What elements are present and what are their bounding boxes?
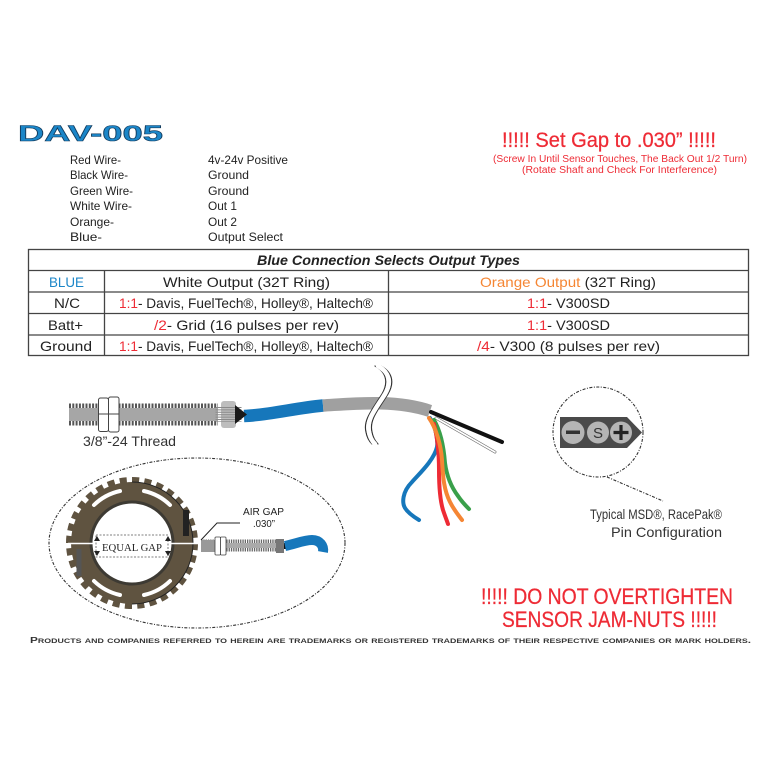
wire colour list: Green Wire- bbox=[70, 184, 133, 198]
white output column: White Output (32T Ring) bbox=[163, 274, 330, 290]
dashed magnifier circle bbox=[553, 387, 643, 477]
air gap detail inset bbox=[49, 458, 345, 628]
first column labels: N/C bbox=[54, 295, 80, 311]
dashed ellipse bbox=[49, 458, 345, 628]
wire colour list: Output Select bbox=[208, 230, 284, 244]
knurled collar bbox=[221, 401, 236, 428]
orange output column: 1:1- V300SD bbox=[527, 317, 610, 333]
grey cable bbox=[323, 403, 430, 411]
small blue cable bbox=[285, 540, 323, 552]
black strain relief tip bbox=[235, 405, 247, 424]
table heading: Blue Connection Selects Output Types bbox=[257, 252, 520, 268]
first column labels: Ground bbox=[40, 338, 92, 354]
wire colour list: Ground bbox=[208, 184, 249, 198]
white wire bbox=[436, 418, 495, 452]
wire colour list: White Wire- bbox=[70, 199, 132, 213]
gap warning callout: (Screw In Until Sensor Touches, The Back Out 1/2 Turn) bbox=[493, 153, 747, 165]
thread size label: 3/8”-24 Thread bbox=[83, 433, 176, 449]
cable break mark bbox=[365, 366, 392, 444]
pin plus bbox=[610, 422, 632, 444]
jam nuts bbox=[98, 397, 119, 432]
pin configuration caption: Pin Configuration bbox=[611, 524, 722, 540]
orange output column: 1:1- V300SD bbox=[527, 295, 610, 311]
pin configuration inset bbox=[553, 387, 663, 501]
pin minus bbox=[562, 421, 584, 444]
gap warning callout: (Rotate Shaft and Check For Interference) bbox=[522, 164, 717, 176]
white output column: /2- Grid (16 pulses per rev) bbox=[154, 317, 339, 333]
gap warning callout bbox=[493, 129, 747, 176]
threaded shaft bbox=[69, 408, 218, 421]
wire colour list: Out 2 bbox=[208, 215, 237, 229]
green wire bbox=[434, 420, 469, 509]
orange output column bbox=[477, 274, 660, 354]
white output column bbox=[119, 274, 374, 354]
wire colour list: Red Wire- bbox=[70, 153, 121, 167]
reluctor ring bbox=[68, 481, 198, 605]
orange output column: /4- V300 (8 pulses per rev) bbox=[477, 338, 660, 354]
air gap leader bbox=[201, 523, 240, 540]
air gap label bbox=[243, 507, 284, 530]
pin signal: S bbox=[593, 425, 603, 442]
first column labels: Batt+ bbox=[48, 317, 83, 333]
equal gap box: EQUAL GAP bbox=[102, 542, 162, 554]
pin configuration caption bbox=[590, 506, 723, 540]
wire colour list: Blue- bbox=[70, 230, 102, 244]
orange wire bbox=[429, 418, 462, 520]
trademark footer: Products and companies referred to herein are trademarks or registered trademarks of their respective companies or mark holders. bbox=[30, 636, 751, 645]
blue sleeve bbox=[244, 406, 323, 416]
wire colour list: Ground bbox=[208, 168, 249, 182]
wire colour list: Black Wire- bbox=[70, 168, 128, 182]
blue wire bbox=[403, 418, 437, 520]
sensor with cable and wires bbox=[69, 366, 502, 524]
red wire bbox=[434, 424, 448, 524]
wire colour list: Orange- bbox=[70, 215, 114, 229]
orange output column: Orange Output (32T Ring) bbox=[480, 274, 656, 290]
white output column: 1:1- Davis, FuelTech®, Holley®, Haltech® bbox=[119, 295, 374, 311]
overtighten warning: !!!!! DO NOT OVERTIGHTEN bbox=[481, 584, 733, 609]
wire colour list: Out 1 bbox=[208, 199, 237, 213]
overtighten warning bbox=[481, 584, 733, 632]
connector body bbox=[560, 417, 642, 448]
output types table bbox=[28, 250, 748, 356]
white output column: 1:1- Davis, FuelTech®, Holley®, Haltech® bbox=[119, 338, 374, 354]
title: DAV-005 bbox=[18, 121, 163, 146]
equal gap box bbox=[94, 535, 171, 557]
first column labels: BLUE bbox=[49, 274, 84, 290]
wire colour list: 4v-24v Positive bbox=[208, 153, 288, 167]
leader line bbox=[607, 477, 663, 501]
overtighten warning: SENSOR JAM-NUTS !!!!! bbox=[502, 607, 717, 632]
air gap label: AIR GAP bbox=[243, 507, 284, 518]
wire colour list bbox=[70, 153, 288, 244]
small sensor bbox=[201, 537, 286, 555]
pin configuration caption: Typical MSD®, RacePak® bbox=[590, 506, 723, 522]
gap warning callout: !!!!! Set Gap to .030” !!!!! bbox=[502, 129, 716, 152]
black wire bbox=[431, 412, 502, 442]
first column labels bbox=[40, 274, 92, 354]
air gap label: .030” bbox=[253, 519, 275, 530]
